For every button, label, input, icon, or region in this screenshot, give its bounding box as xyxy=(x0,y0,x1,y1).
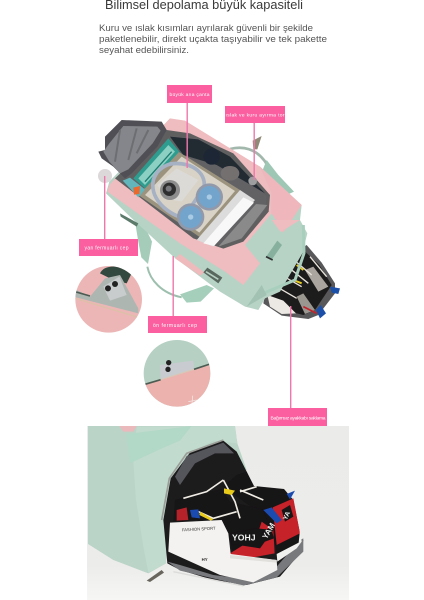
laces xyxy=(183,480,263,518)
leader lines xyxy=(104,103,291,409)
strap buckle and side handle xyxy=(203,268,222,283)
flap with mesh xyxy=(98,120,167,178)
bag body pink xyxy=(107,118,272,285)
inset circle: front pocket with phone xyxy=(144,340,210,407)
inset circle: side pocket with phone xyxy=(75,266,142,333)
product photo: shoe compartment: FASHION SPORT xyxy=(182,526,216,532)
product photo: shoe compartment: HY xyxy=(202,557,208,562)
headphone discs xyxy=(196,183,223,211)
white side panel and sole xyxy=(168,520,277,582)
front shoe upper xyxy=(173,489,275,555)
bag body mint xyxy=(106,118,307,310)
product photo: shoe compartment: YAM xyxy=(261,521,277,541)
pink top trim xyxy=(119,426,137,432)
laptop xyxy=(197,190,255,247)
callout: büyük ana çanta xyxy=(167,85,212,103)
product photo: shoe compartment: YA xyxy=(282,510,292,521)
callout: ıslak ve kuru ayırma torbası xyxy=(225,106,285,123)
inner dark pocket xyxy=(170,137,265,193)
callout: büyük ana çanta: büyük ana çanta xyxy=(170,92,210,98)
red heel xyxy=(230,522,275,557)
teal notebook xyxy=(133,138,179,188)
description text xyxy=(99,23,327,56)
bottom handle strap xyxy=(147,267,182,297)
callout: yan fermuarlı cep: yan fermuarlı cep xyxy=(84,246,129,252)
book/tray xyxy=(138,152,240,238)
top handle xyxy=(230,148,267,165)
description text: paketlenebilir, direkt uçakta taşıyabilir ve tek pakette xyxy=(99,34,327,45)
interior opening xyxy=(115,130,270,249)
description text: seyahat edebilirsiniz. xyxy=(99,45,189,56)
bag body xyxy=(88,426,247,573)
description text: Kuru ve ıslak kısımları ayrılarak güvenli bir şekilde xyxy=(99,23,313,34)
rear shoe xyxy=(223,472,300,555)
callout: ıslak ve kuru ayırma torbası: ıslak ve kuru ayırma tor xyxy=(226,112,285,118)
side pocket marker dot xyxy=(98,169,112,183)
shoe compartment (open end) xyxy=(263,245,335,319)
callout: ön fermuarlı cep xyxy=(148,316,207,333)
illustration: open duffel bag from above xyxy=(98,118,340,319)
headphones xyxy=(153,164,204,218)
callout: bağımsız ayakkabı saklama xyxy=(268,408,327,426)
callout: yan fermuarlı cep xyxy=(79,239,138,256)
product photo: shoe compartment xyxy=(87,426,349,600)
callout: ön fermuarlı cep: ön fermuarlı cep xyxy=(153,323,197,329)
zipper pull xyxy=(147,570,164,582)
shoe text: YOHJ xyxy=(232,533,256,543)
callout: bağımsız ayakkabı saklama: Bağımsız ayakkabı saklama xyxy=(270,416,326,422)
compartment interior xyxy=(163,441,303,585)
tags xyxy=(199,512,213,521)
camera xyxy=(157,168,198,202)
